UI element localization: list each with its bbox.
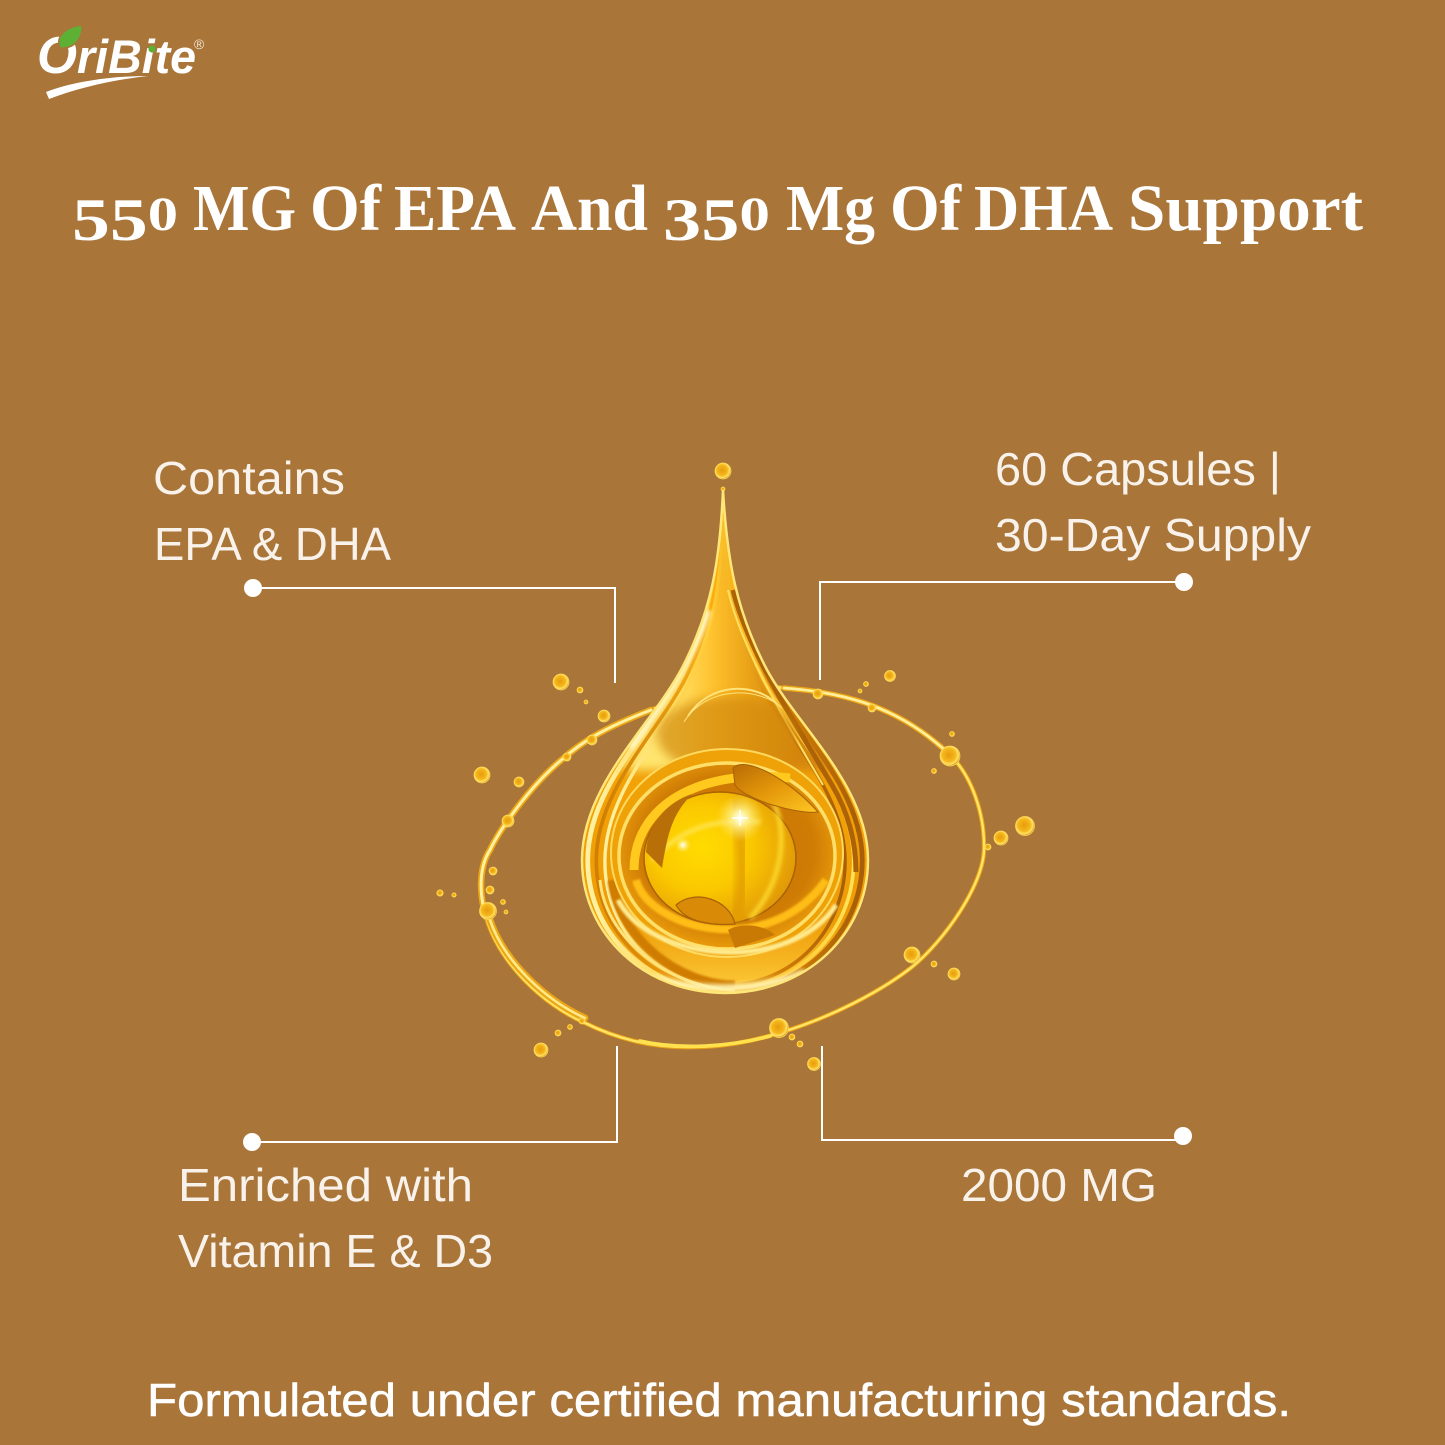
leader dot xyxy=(243,1133,261,1151)
title: MG xyxy=(193,172,296,245)
title: Support xyxy=(1128,172,1363,245)
label: 60 Capsules | 30-Day Supply: 60 Capsules | xyxy=(995,443,1281,495)
title: 55 xyxy=(72,187,148,253)
mid chamber highlight xyxy=(657,697,797,773)
label: Contains EPA & DHA: Contains xyxy=(153,452,345,504)
title: 0 xyxy=(148,188,178,241)
icon: green i-dot xyxy=(148,45,156,53)
registered mark: ® xyxy=(194,36,205,52)
star glint xyxy=(718,796,762,840)
title xyxy=(72,172,1363,253)
logo swoosh xyxy=(46,76,148,99)
drop rim xyxy=(582,490,868,993)
leader line xyxy=(822,1046,1183,1140)
callout: bottom right xyxy=(822,1046,1192,1211)
label: 60 Capsules | 30-Day Supply: 30-Day Supply xyxy=(995,509,1311,561)
leader line xyxy=(252,1046,617,1142)
title: DHA xyxy=(974,172,1113,245)
inner sphere xyxy=(644,792,796,924)
label: 2000 MG: 2000 MG xyxy=(961,1159,1157,1211)
footer statement: Formulated under certified manufacturing standards. xyxy=(147,1374,1291,1426)
oil drop xyxy=(570,480,880,1000)
oil ring xyxy=(481,686,984,1047)
title: 35 xyxy=(663,187,739,253)
logo: OriBite xyxy=(37,25,205,99)
leader line xyxy=(820,582,1184,680)
bubbles xyxy=(437,463,1034,1070)
leader dot xyxy=(1175,573,1193,591)
bottom capsule xyxy=(676,897,735,924)
neck highlight xyxy=(630,610,708,748)
label: Enriched with Vitamin E & D3: Vitamin E & D3 xyxy=(178,1225,493,1277)
leader line xyxy=(253,588,615,683)
label: Contains EPA & DHA xyxy=(153,452,391,570)
neck sheen xyxy=(617,566,832,776)
title: EPA xyxy=(394,172,516,245)
callout: top left xyxy=(153,452,615,683)
title: 0 xyxy=(739,188,770,241)
title: Of xyxy=(890,172,962,245)
dark right band xyxy=(733,590,856,872)
callout: bottom left xyxy=(178,1046,617,1277)
label: Enriched with Vitamin E & D3 xyxy=(178,1159,493,1277)
leader dot xyxy=(1174,1127,1192,1145)
icon: leaf xyxy=(59,25,82,48)
label: 60 Capsules | 30-Day Supply xyxy=(995,443,1311,561)
top capsule xyxy=(733,764,818,812)
callout: top right xyxy=(820,443,1311,680)
title: Mg xyxy=(786,172,875,245)
leader dot xyxy=(244,579,262,597)
lower bands xyxy=(612,880,735,985)
label: Enriched with Vitamin E & D3: Enriched with xyxy=(178,1159,473,1211)
label: Contains EPA & DHA: EPA & DHA xyxy=(154,518,391,570)
title: Of xyxy=(310,172,382,245)
contour bands following the drop outline xyxy=(588,496,862,991)
logo wordmark: OriBite xyxy=(37,27,196,85)
title: And xyxy=(531,172,648,245)
chamber rings xyxy=(611,749,843,957)
